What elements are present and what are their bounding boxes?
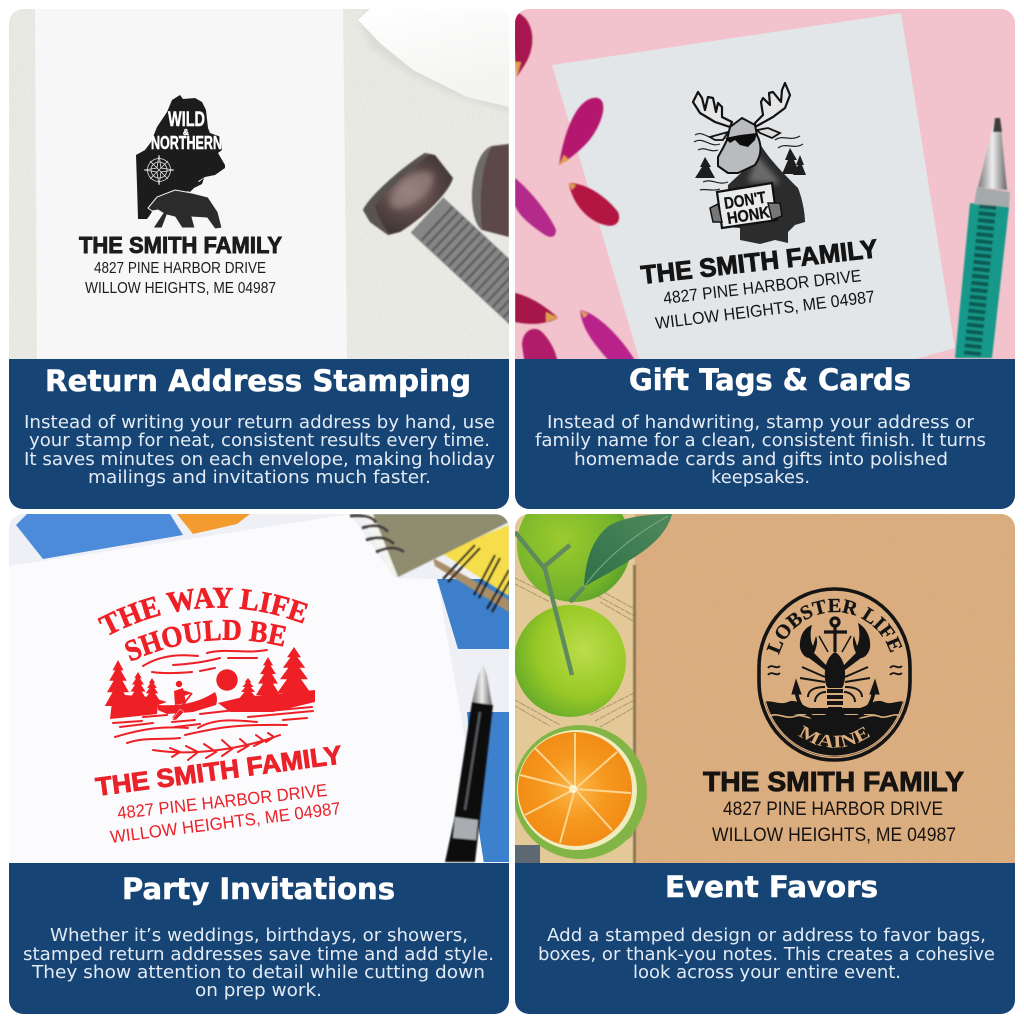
bolt shaft and head — [362, 152, 509, 325]
description — [23, 926, 494, 1001]
inner ring line — [763, 593, 906, 756]
description: look across your entire event. — [633, 963, 901, 983]
stamp: address text: WILLOW HEIGHTS, ME 04987 — [109, 798, 342, 847]
waves and lower band — [755, 701, 915, 762]
description — [24, 413, 495, 488]
stamp: way life should be — [97, 588, 315, 761]
wave lines — [770, 715, 900, 718]
description — [538, 926, 995, 983]
curved slogan: SHOULD BE — [125, 620, 286, 661]
stamp: address text — [703, 766, 964, 846]
panel: party invitations — [9, 514, 509, 1014]
curved slogan: THE WAY LIFE — [97, 588, 308, 636]
waves — [113, 650, 313, 743]
stamp: address text: WILLOW HEIGHTS, ME 04987 — [654, 287, 876, 333]
sign — [717, 183, 777, 228]
wild and northern lettering — [152, 111, 222, 150]
photo: desk background — [9, 514, 509, 864]
moose head — [718, 118, 761, 173]
sand grain — [9, 9, 509, 359]
canoe with paddler — [158, 681, 217, 720]
newspaper print — [515, 578, 640, 850]
neck fur — [748, 155, 780, 184]
pine trees — [105, 647, 311, 706]
lobster — [800, 623, 870, 726]
stamp: moose holding sign — [693, 83, 806, 244]
caption band — [515, 863, 1015, 1014]
yellow notebook — [433, 525, 514, 612]
heading: Party Invitations — [122, 872, 395, 906]
stamp: address text: THE SMITH FAMILY — [94, 739, 344, 802]
heading: Return Address Stamping — [45, 364, 471, 398]
curved lettering: MAINE — [798, 725, 870, 748]
stem — [515, 532, 584, 675]
towel — [358, 9, 509, 112]
curved lettering: LOBSTER LIFE — [766, 598, 902, 655]
small wave marks — [768, 666, 902, 675]
stamp: address text: THE SMITH FAMILY — [639, 233, 879, 290]
description: stamped return addresses save time and add style. — [23, 945, 494, 965]
pen — [445, 664, 493, 862]
hands — [710, 203, 782, 222]
moose body — [727, 138, 805, 244]
stamp: address text — [79, 232, 282, 297]
newspaper background — [515, 514, 636, 864]
photo: sand background — [9, 9, 509, 359]
stamp: Maine silhouette with bear — [136, 95, 225, 229]
caption band — [9, 359, 509, 509]
wild and northern lettering: WILD — [168, 108, 205, 131]
bear — [148, 190, 222, 229]
compass rose — [144, 155, 174, 185]
stamp: address text: WILLOW HEIGHTS, ME 04987 — [712, 825, 956, 846]
olive notebook — [350, 514, 509, 577]
shoreline land — [110, 690, 315, 719]
blue folder right — [437, 579, 509, 649]
right bolt — [472, 144, 509, 237]
top lime — [517, 488, 631, 602]
description: on prep work. — [195, 981, 322, 1001]
description: Instead of handwriting, stamp your address or — [547, 413, 975, 433]
description: It saves minutes on each envelope, making holiday — [24, 450, 495, 470]
dark stone — [515, 845, 540, 864]
photo: pink background — [515, 9, 1015, 359]
middle lime — [514, 605, 626, 717]
kraft paper — [635, 514, 1015, 864]
panel: return address stamping — [9, 9, 509, 509]
paper shadow edge — [633, 565, 636, 864]
curved slogan — [97, 588, 308, 661]
sign: HONK — [726, 203, 771, 228]
pen — [955, 118, 1010, 358]
description: boxes, or thank-you notes. This creates a cohesive — [538, 945, 995, 965]
stamp: address text — [94, 739, 344, 847]
badge outline — [759, 589, 910, 760]
moose ears — [710, 128, 780, 140]
stamp: address text: 4827 PINE HARBOR DRIVE — [116, 780, 328, 823]
curved lettering — [766, 598, 902, 748]
blue paper top — [16, 514, 183, 559]
caption band — [515, 359, 1015, 509]
stamp: address text: 4827 PINE HARBOR DRIVE — [94, 260, 266, 277]
stamp: lobster life badge — [757, 587, 912, 762]
stamp: address text — [640, 238, 877, 329]
description: homemade cards and gifts into polished — [574, 450, 948, 470]
heading: Event Favors — [665, 870, 878, 904]
orange slice — [513, 725, 647, 859]
moose pine trees — [695, 148, 806, 178]
leaf — [584, 514, 672, 587]
description: Instead of writing your return address by hand, use — [24, 413, 495, 433]
anchor — [792, 618, 879, 722]
description: family name for a clean, consistent finish. It turns — [535, 431, 986, 451]
sign: DON'T — [723, 189, 767, 213]
petals — [514, 12, 636, 365]
description: your stamp for neat, consistent results every time. — [29, 431, 490, 451]
description — [535, 413, 986, 488]
invitation paper — [9, 514, 484, 864]
wild and northern lettering: NORTHERN — [151, 133, 222, 153]
white card — [35, 9, 347, 359]
caption band — [9, 863, 509, 1014]
antlers — [693, 92, 732, 127]
stamp: address text: WILLOW HEIGHTS, ME 04987 — [85, 280, 276, 297]
orange paper top — [177, 514, 250, 534]
heading: Gift Tags & Cards — [629, 363, 911, 397]
kraft grain — [635, 514, 1015, 864]
branch — [153, 733, 280, 760]
description: Add a stamped design or address to favor bags, — [547, 926, 986, 946]
stamp: address text: THE SMITH FAMILY — [703, 766, 964, 797]
background swirls — [694, 134, 803, 190]
stamp: address text: THE SMITH FAMILY — [79, 232, 282, 258]
lower blue folder — [467, 712, 509, 862]
panel: gift tags and cards — [514, 9, 1015, 509]
description: They show attention to detail while cutting down — [31, 963, 485, 983]
sun — [216, 669, 238, 691]
panel: event favors — [515, 514, 1015, 1014]
description: mailings and invitations much faster. — [88, 468, 431, 488]
stamp: address text: 4827 PINE HARBOR DRIVE — [723, 799, 943, 820]
description: keepsakes. — [711, 468, 810, 488]
white card — [552, 13, 955, 362]
segment membranes — [520, 733, 631, 843]
description: Whether it’s weddings, birthdays, or showers, — [50, 926, 468, 946]
coastal islands — [188, 178, 204, 192]
wild and northern lettering: & — [183, 128, 189, 137]
sunglasses — [725, 133, 757, 147]
stamp: address text: 4827 PINE HARBOR DRIVE — [662, 266, 862, 308]
